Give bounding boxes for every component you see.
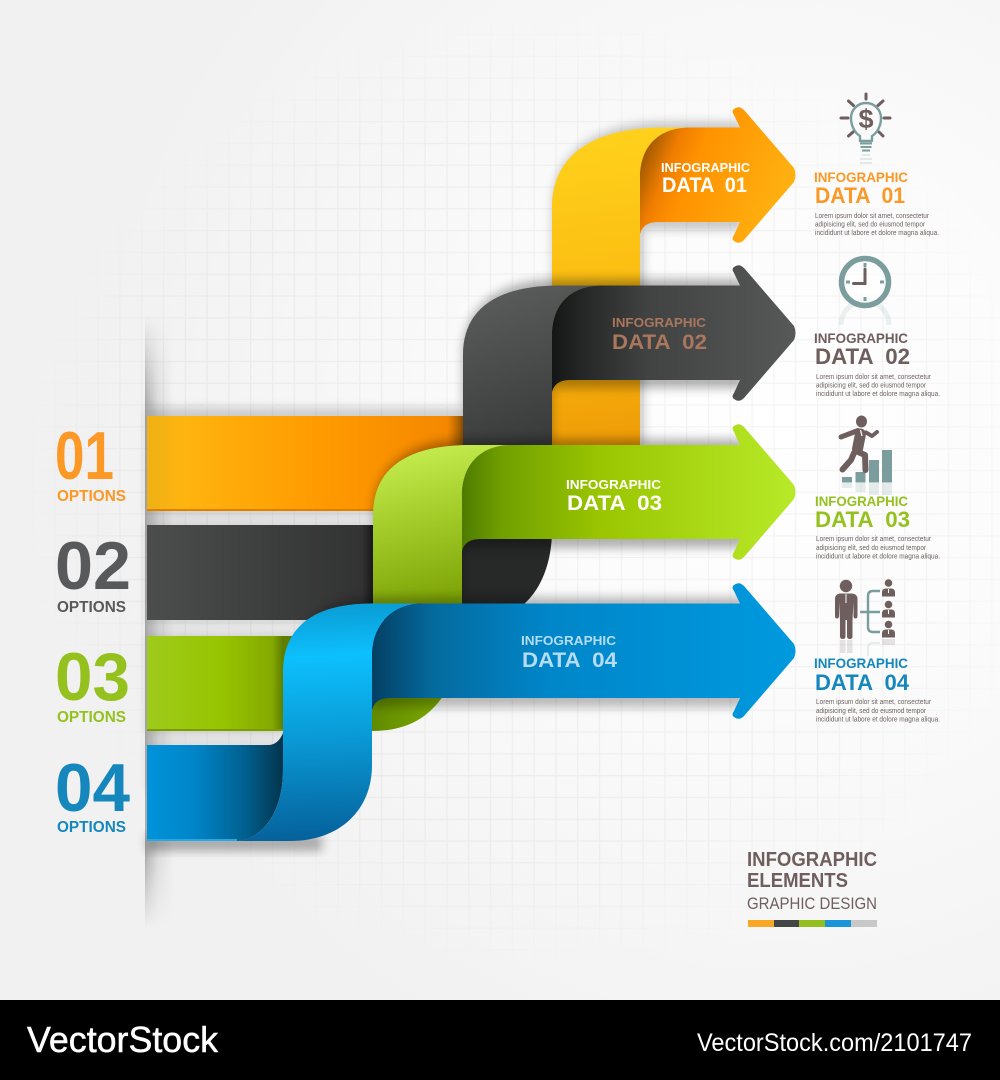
title block: INFOGRAPHIC: [747, 849, 877, 871]
arrow face 03: [462, 424, 796, 560]
data block 04: Lorem ipsum dolor sit amet, consectetur: [816, 699, 932, 706]
data block 03: incididunt ut labore et dolore magna aliqua.: [816, 554, 940, 560]
data block 02: adipisicing elit, sed do eiusmod tempor: [816, 382, 927, 390]
data block 01: incididunt ut labore et dolore magna aliqua.: [815, 230, 939, 237]
arrow face 04: [372, 583, 796, 719]
footer watermark bar: [0, 1000, 1000, 1080]
data block 02: INFOGRAPHIC: [814, 330, 908, 346]
option 03: 03: [55, 639, 130, 715]
option 02: 02: [55, 528, 131, 604]
data block 02: DATA 02: [815, 344, 910, 369]
data block 03: [815, 493, 940, 560]
icon: clock: [841, 258, 889, 325]
data block 02: Lorem ipsum dolor sit amet, consectetur: [816, 374, 932, 381]
ribbon arrow 03 green: [147, 424, 796, 735]
arrow label 04: INFOGRAPHIC: [521, 633, 617, 648]
dark fold 02: [463, 286, 602, 445]
wall shadow: [145, 324, 168, 920]
arrow label 02: INFOGRAPHIC: [612, 315, 707, 330]
option 02: OPTIONS: [57, 599, 126, 616]
arrow label 04: DATA 04: [522, 649, 617, 672]
ribbon arrow 04 blue: [147, 583, 796, 851]
icon: light bulb with dollar: [841, 94, 890, 163]
icon: light bulb with dollar: $: [858, 104, 874, 134]
footer watermark bar: VectorStock: [27, 1019, 219, 1060]
green fold 03: [373, 445, 512, 604]
option 03: OPTIONS: [57, 709, 126, 726]
arrow label 03: [566, 477, 662, 515]
arrow label 01: [661, 160, 751, 197]
data block 03: Lorem ipsum dolor sit amet, consectetur: [816, 536, 932, 543]
arrow label 01: INFOGRAPHIC: [661, 160, 751, 175]
data block 01: DATA 01: [815, 183, 905, 208]
option 01: OPTIONS: [57, 488, 126, 505]
option 01: 01: [55, 418, 114, 494]
option numbers panel: [55, 418, 131, 836]
title block: [747, 849, 877, 927]
option 04: 04: [55, 750, 130, 826]
data block 03: DATA 03: [815, 507, 910, 532]
blue bar 04: [147, 733, 283, 841]
arrow label 01: DATA 01: [662, 174, 747, 197]
data block 04: INFOGRAPHIC: [814, 655, 908, 671]
arrow face 01: [640, 107, 796, 243]
data block 01: [814, 169, 939, 237]
data block 04: incididunt ut labore et dolore magna aliqua.: [816, 716, 940, 724]
option 04: OPTIONS: [57, 819, 126, 836]
data block 02: incididunt ut labore et dolore magna aliqua.: [816, 391, 940, 398]
footer watermark bar: VectorStock.com/2101747: [697, 1029, 972, 1057]
yellow fold 01: [552, 128, 690, 445]
title block: GRAPHIC DESIGN: [747, 894, 877, 913]
title block: ELEMENTS: [747, 870, 848, 892]
data block 03: INFOGRAPHIC: [815, 493, 908, 509]
arrow label 04: [521, 633, 617, 672]
data block 04: DATA 04: [815, 670, 910, 695]
arrow label 02: [612, 315, 707, 354]
ribbon arrow 01 orange: [147, 107, 796, 515]
arrow label 03: INFOGRAPHIC: [566, 477, 662, 492]
icon: runner on bar chart: [841, 416, 892, 495]
ribbon arrow 02 dark: [147, 265, 796, 624]
arrow face 02: [552, 265, 796, 401]
colour key bar: [748, 920, 877, 927]
data block 04: [814, 655, 940, 724]
data block 01: INFOGRAPHIC: [814, 169, 908, 185]
data block 01: Lorem ipsum dolor sit amet, consectetur: [815, 213, 930, 220]
data block 01: adipisicing elit, sed do eiusmod tempor: [815, 222, 926, 228]
data block 02: [814, 330, 940, 398]
arrow label 03: DATA 03: [567, 492, 662, 515]
arrow label 02: DATA 02: [612, 331, 707, 354]
blue fold 04: [235, 604, 422, 841]
data block 04: adipisicing elit, sed do eiusmod tempor: [816, 708, 927, 715]
icon: manager with team: [835, 579, 895, 656]
data block 03: adipisicing elit, sed do eiusmod tempor: [816, 545, 927, 552]
